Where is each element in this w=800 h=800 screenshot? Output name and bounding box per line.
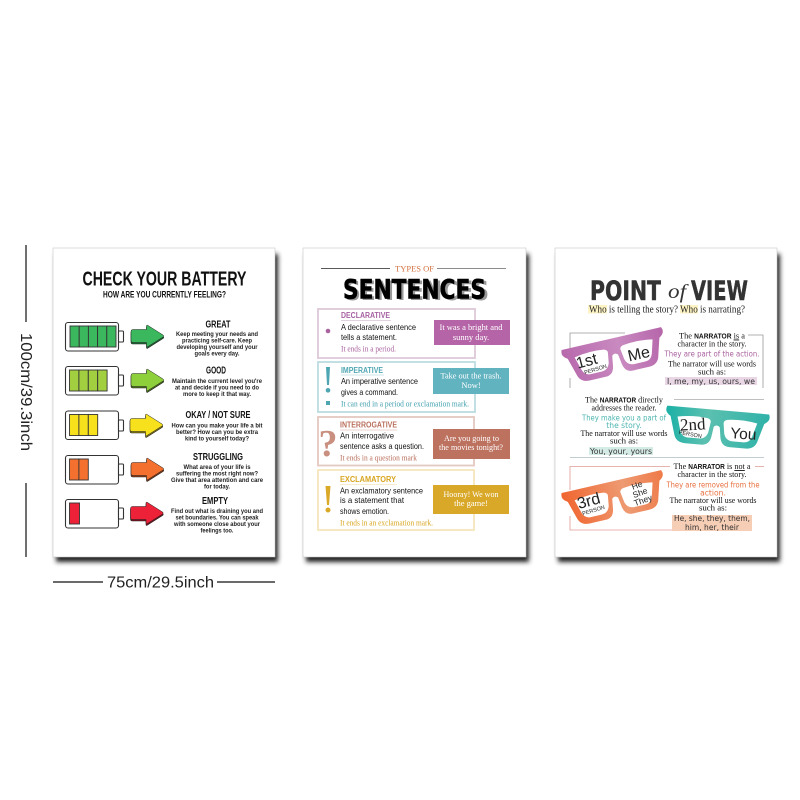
arrow: orange — [131, 458, 164, 481]
label: he she they: He — [630, 479, 644, 492]
frame lines: first person — [570, 333, 763, 388]
text: empty: feelings too. — [200, 528, 234, 534]
box: interrogative: It ends in a question mark — [340, 454, 418, 462]
callout: declarative example: sunny day. — [453, 332, 489, 342]
text: third person narrator: He, she, they, them, — [674, 514, 750, 523]
text: first person narrator: The narrator will use words — [668, 358, 757, 368]
text: good: at and decide if you need to do — [175, 384, 259, 392]
box: imperative: An imperative sentence — [341, 376, 418, 386]
text: good: more to keep it that way. — [183, 391, 251, 398]
text: great: practicing self-care. Keep — [182, 338, 252, 344]
title: sentences: SENTENCES — [345, 276, 489, 307]
text: great: GREAT — [206, 320, 230, 330]
text: great: goals every day. — [194, 350, 240, 358]
box: exclamatory: An exclamatory sentence — [340, 486, 423, 496]
label: he she they: They — [632, 492, 654, 508]
callout: exclamatory example — [433, 485, 509, 514]
panel: check your battery — [53, 248, 278, 562]
text: empty: set boundaries. You can speak — [176, 514, 259, 522]
text: great — [176, 320, 258, 358]
callout: interrogative example: the movies tonight? — [439, 442, 503, 452]
icon: question mark: ? — [318, 423, 338, 465]
label: 1st person — [574, 351, 608, 376]
box: declarative: DECLARATIVE — [341, 310, 390, 320]
title: sentences: SENTENCES — [343, 274, 486, 306]
text: first person narrator: I, me, my, us, ours, we — [667, 377, 755, 386]
label: 1st person: PERSON — [584, 364, 608, 376]
text: first person narrator: The NARRATOR is a — [679, 330, 745, 340]
callout: declarative example: It was a bright and — [440, 322, 503, 332]
text: okay — [172, 410, 262, 442]
battery row: great — [66, 322, 124, 351]
text: second person narrator: The narrator will use words — [580, 428, 668, 438]
text: struggling — [171, 452, 264, 490]
label: 2nd person: 2nd — [679, 414, 706, 435]
divider: second to third — [570, 456, 764, 458]
box: exclamatory — [318, 470, 474, 530]
text: third person narrator: action. — [700, 488, 726, 498]
icon: exclamation gold — [326, 486, 331, 512]
dimension: height: 100cm/39.3inch — [17, 333, 34, 451]
text: third person narrator: The narrator will use words — [670, 495, 757, 505]
text: okay: OKAY / NOT SURE — [186, 410, 251, 421]
text: third person narrator: They are removed from the — [666, 480, 760, 490]
title: point of view: POINT — [590, 276, 661, 307]
text: good: Maintain the current level you're — [172, 378, 263, 385]
text: struggling: suffering the most right now? — [176, 470, 258, 478]
text: third person narrator — [666, 461, 760, 532]
glasses: third person — [561, 470, 670, 528]
box: interrogative: An interrogative — [340, 430, 394, 440]
frame lines: third person — [570, 466, 764, 530]
text: first person narrator: They are part of the action. — [664, 350, 760, 358]
battery row: okay — [66, 411, 124, 440]
label: 3rd person: PERSON — [582, 505, 606, 517]
callout: imperative example: Take out the trash. — [440, 370, 502, 380]
icon: period — [326, 329, 330, 333]
text: third person narrator: such as: — [699, 502, 727, 512]
battery row: empty — [66, 500, 124, 528]
box: interrogative: INTERROGATIVE — [340, 420, 397, 430]
glasses: first person — [561, 327, 670, 385]
text: second person narrator: the story. — [606, 421, 642, 430]
text: okay: How can you make your life a bit — [172, 422, 262, 430]
panel: types of sentences — [303, 248, 529, 562]
callout: imperative example — [433, 368, 509, 394]
text: third person narrator: The NARRATOR is not a — [674, 461, 751, 471]
text: first person narrator: character in the story. — [678, 338, 746, 348]
title: point of view — [590, 276, 748, 307]
text: second person narrator — [580, 394, 668, 456]
box: declarative — [318, 309, 475, 358]
text: empty: EMPTY — [202, 496, 228, 507]
box: imperative — [318, 362, 475, 412]
label: he she they — [630, 479, 654, 508]
box: interrogative — [318, 417, 474, 466]
box: imperative: gives a command. — [341, 387, 398, 397]
box: interrogative: sentence asks a question. — [340, 441, 424, 451]
battery row: good — [66, 366, 124, 395]
text: struggling: STRUGGLING — [193, 452, 243, 463]
text: empty: with someone close about your — [173, 521, 261, 528]
label: me: Me — [626, 344, 652, 365]
arrow: lime — [131, 369, 164, 392]
title: point of view: VIEW — [691, 276, 748, 307]
callout: exclamatory example: the game! — [454, 498, 488, 508]
box: exclamatory: It ends in an exclamation mark. — [340, 518, 433, 528]
callout: interrogative example: Are you going to — [444, 433, 499, 443]
text: first person narrator: such as: — [698, 366, 726, 376]
text: great: Keep meeting your needs and — [176, 331, 258, 338]
label: 1st person: 1st — [574, 351, 600, 373]
text: second person narrator: addresses the reader. — [592, 402, 656, 412]
text: empty — [171, 496, 263, 534]
box: exclamatory: shows emotion. — [340, 506, 389, 516]
text: good: GOOD — [206, 366, 226, 376]
text: second person narrator: such as: — [610, 436, 638, 446]
text: second person narrator: The NARRATOR directly — [585, 394, 664, 404]
callout: imperative example: Now! — [461, 380, 481, 390]
text: good — [172, 366, 263, 398]
box: declarative: It ends in a period. — [341, 344, 396, 354]
box: declarative: tells a statement. — [341, 332, 397, 342]
battery row: struggling — [66, 456, 124, 484]
text: empty: Find out what is draining you and — [171, 508, 263, 515]
text: great: developing yourself and your — [176, 344, 258, 351]
box: exclamatory: is a statement that — [340, 495, 405, 505]
subtitle: how are you feeling: HOW ARE YOU CURRENTLY FEELING? — [103, 290, 226, 300]
box: exclamatory: EXCLAMATORY — [340, 474, 396, 484]
label: 3rd person: 3rd — [575, 490, 602, 513]
text: struggling: What area of your life is — [184, 464, 251, 471]
box: imperative: IMPERATIVE — [341, 365, 383, 375]
panel: point of view — [555, 248, 780, 562]
arrow: yellow — [130, 414, 163, 437]
callout: exclamatory example: Hooray! We won — [444, 489, 499, 499]
title: point of view: of — [668, 281, 689, 303]
subtitle: who is telling the story: Who is telling the story? Who is narrating? — [589, 304, 745, 316]
arrow: green — [131, 325, 164, 348]
text: okay: better? How can you be extra — [176, 429, 259, 436]
title: check your battery: CHECK YOUR BATTERY — [82, 268, 247, 290]
text: struggling: Give that area attention and care — [171, 477, 264, 484]
text: first person narrator — [664, 330, 760, 386]
text: second person narrator: They make you a part of — [581, 414, 666, 422]
callout: declarative example — [434, 320, 510, 345]
text: third person narrator: him, her, their — [685, 523, 740, 532]
label: he she they: She — [631, 485, 649, 500]
frame line: second person top — [674, 398, 764, 400]
heading: types of: TYPES OF — [395, 264, 434, 274]
label: 2nd person: PERSON — [678, 430, 702, 440]
icon: exclamation — [326, 367, 330, 405]
dimension: width: 75cm/29.5inch — [107, 574, 214, 592]
glasses: second person — [663, 405, 770, 450]
text: struggling: for today. — [204, 484, 230, 490]
text: okay: kind to yourself today? — [185, 436, 249, 442]
callout: interrogative example — [433, 429, 510, 459]
label: you: You — [730, 425, 757, 444]
text: second person narrator: You, your, yours — [589, 447, 652, 456]
text: third person narrator: character in the story. — [678, 469, 746, 479]
box: imperative: It can end in a period or exclamation mark. — [341, 400, 469, 408]
box: declarative: A declarative sentence — [341, 322, 416, 332]
arrow: red — [130, 502, 163, 525]
